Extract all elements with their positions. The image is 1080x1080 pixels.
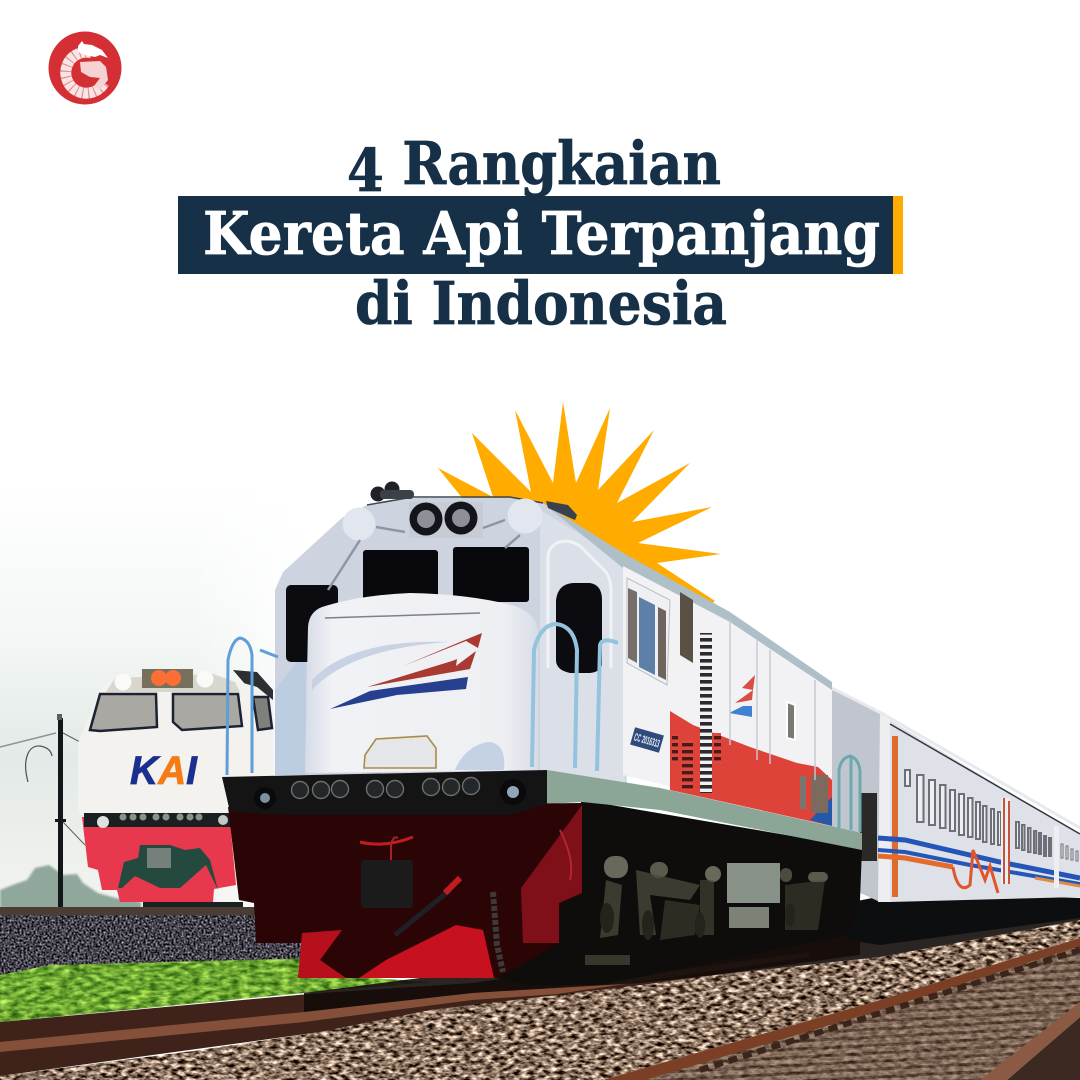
grey ballast embankment [0,915,320,975]
coupler assembly [360,830,571,972]
carriage end wall [832,690,883,902]
buffer beam lights [292,778,480,798]
carriage roof line [890,724,1080,834]
right rail one [603,938,1080,1080]
plow lit side [521,805,582,943]
title line 3: di Indonesia [355,269,727,338]
title accent [893,196,903,274]
sky haze behind the rear train [0,594,280,907]
hood grilles in red band [672,733,828,813]
rear loco body [78,673,273,815]
cab struts [328,520,520,590]
rear loco marker lights [114,670,214,690]
red lower hood band [670,711,832,826]
title line 1: 4 [347,136,384,205]
buffer beam headlights [254,779,526,809]
plow bright red foot [298,930,346,978]
cab left side window [286,585,338,662]
cab door window [556,583,602,673]
rear loco red pilot [82,817,236,902]
cab lighter panels [540,510,625,790]
sleeping bed between right rails [640,945,1080,1080]
hood small logo [729,675,755,717]
cab front windows [363,547,529,602]
carriage white edge [878,714,890,902]
long hood roof [543,503,832,692]
KAI logo on rear loco: KAI [130,749,198,793]
dark bed to the right [1007,1017,1080,1080]
cab side white [623,566,832,825]
grass strip [0,958,430,1022]
right rail two [980,1002,1080,1080]
roof horns [370,482,577,520]
blue handrail left [227,638,278,775]
bogie grey tank [727,863,780,903]
distant trees [0,865,141,918]
nose hatch [364,736,436,768]
rear locomotive [78,669,273,908]
rear track rail [0,907,256,915]
title line 1: Rangkaian [384,129,721,198]
dark blue hood panel [810,797,832,826]
carriage windows [905,770,1078,861]
hood access door [787,702,795,740]
rail clips [700,950,1080,1070]
title [178,129,903,338]
blue handrail on carriage end [839,755,860,832]
rear loco dark band [84,813,234,827]
coupling door on end wall [860,793,877,861]
carriage livery stripes [878,838,1080,893]
under frame and bogies [495,800,862,985]
logo: red circular emblem [48,32,122,104]
rear loco lamps [151,670,181,686]
rear loco roof shadow [233,670,273,702]
carriage orange door [892,736,898,897]
hood panel lines [730,620,815,780]
headlamps [410,502,478,536]
carriage underframe [847,892,1080,945]
foreground ballast [0,920,1080,1080]
buffer beam [222,770,547,815]
rear loco roof band [106,674,240,692]
hood grab bar [325,613,480,618]
cab door frame [548,541,611,668]
rear loco headlight box [142,669,193,688]
plow main dark red [228,803,582,978]
sun burst [438,402,721,620]
main locomotive: CC 2016313 [633,732,661,750]
cab roof rim [367,497,543,505]
number plate [630,727,664,753]
black shadow beneath main locomotive [304,905,1080,1012]
cab side window assembly [627,578,670,685]
carriage side [890,720,1080,902]
arrow livery on nose [330,633,482,709]
title highlight bar [178,196,893,274]
main locomotive [222,482,862,985]
hood soft shadow swoosh [312,642,448,690]
carriage doors between cars [1001,798,1059,888]
rear loco coupler gear [118,845,218,890]
blue handrails front [532,624,618,771]
hood upper vent [680,592,693,663]
nose hood [305,593,538,773]
bogie details [585,856,828,965]
bogie lower box [729,907,769,928]
rear loco wheels [143,902,243,908]
left rail [0,930,860,1076]
title line 2: Kereta Api Terpanjang [203,199,880,268]
white marker discs [342,498,542,540]
headlight housing [409,502,483,538]
hood louver strip [700,633,712,793]
rear loco windows [90,694,272,731]
green running frame [547,770,862,850]
passenger carriages [832,688,1080,945]
utility pole and wires [0,714,85,908]
cab body [275,498,627,800]
